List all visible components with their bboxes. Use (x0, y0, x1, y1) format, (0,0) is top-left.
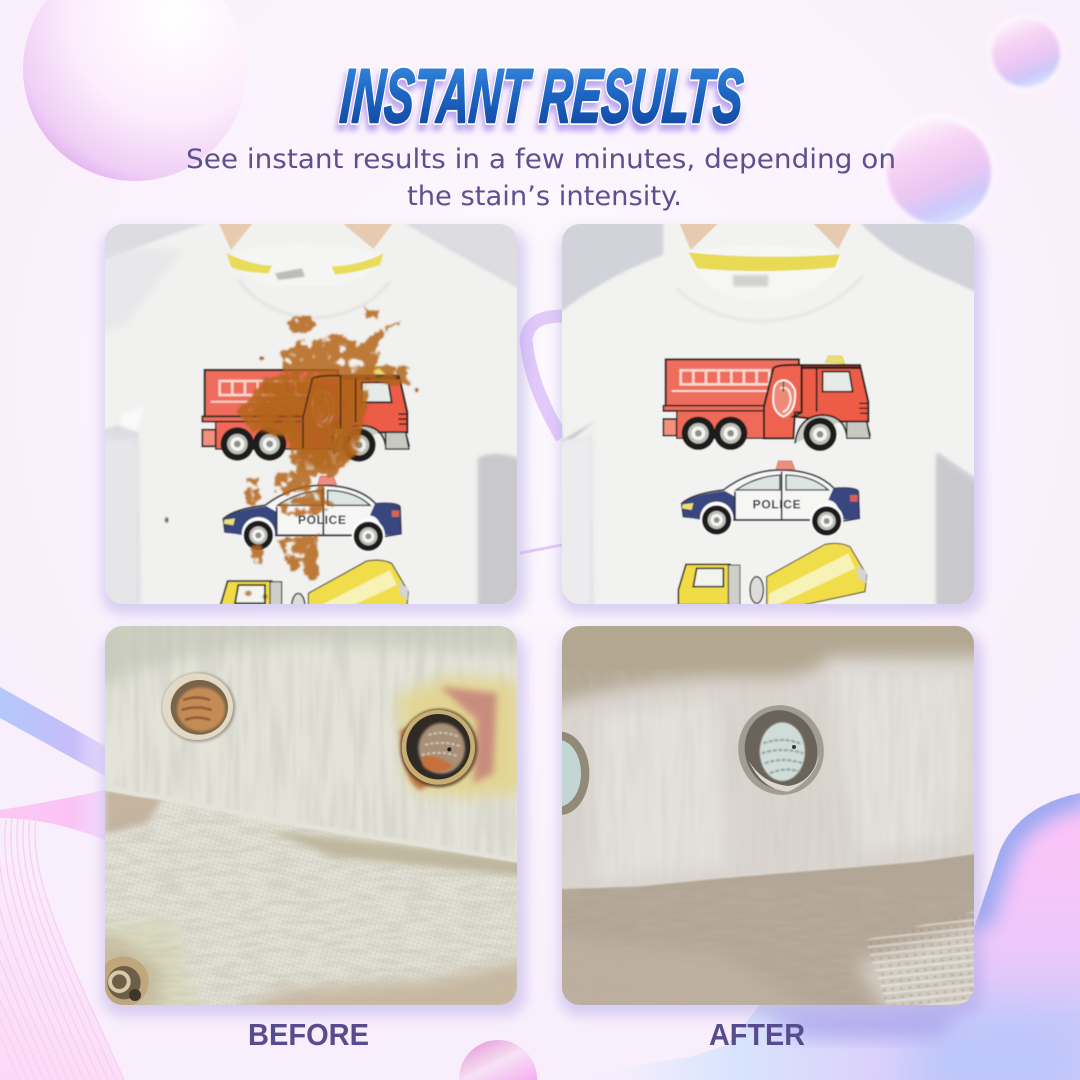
eyelet: left edge (531, 732, 589, 815)
decorative sphere: top left (23, 0, 247, 181)
police car (223, 476, 401, 552)
truck outlines showing through stain (303, 376, 356, 448)
lower fold lines (100, 807, 525, 1010)
flap ribs (555, 670, 980, 887)
inner collar (233, 244, 382, 287)
label: after: AFTER (709, 1017, 805, 1052)
panel shadows (102, 230, 983, 1016)
flap top band (105, 626, 517, 687)
title: INSTANT RESULTS (338, 54, 746, 139)
collar ring (677, 275, 863, 322)
label (275, 268, 305, 280)
flap highlights (595, 670, 968, 880)
eyelet: bottom left (93, 937, 163, 1017)
stain around eyelet (397, 677, 523, 797)
decorative sphere: top right small (988, 15, 1064, 91)
title: INSTANT RESULTS (338, 54, 746, 139)
upper ribbed flap (555, 620, 980, 920)
shirt backdrop (105, 224, 517, 460)
flap ribs (122, 647, 514, 856)
panel: before knit fabric (105, 626, 517, 1005)
flap top band (542, 607, 995, 710)
sleeve shading (98, 248, 525, 612)
decorative line waves: bottom left (0, 818, 124, 1080)
panel: after knit fabric (531, 607, 995, 1017)
yellow neck band (227, 253, 383, 274)
shirt backdrop (562, 224, 974, 484)
hanger (679, 224, 852, 250)
collar ring (238, 280, 390, 318)
decorative blob: bottom right (639, 793, 1080, 1080)
eyelet: centre (728, 695, 834, 805)
fire truck (663, 356, 870, 451)
decorative sphere: right of subtitle (882, 113, 996, 227)
decorative swirl between panels (520, 316, 562, 553)
title (338, 54, 746, 139)
hanger (218, 224, 393, 250)
decorative ribbon: pink strip on left (0, 790, 105, 840)
mixer truck (219, 558, 410, 604)
decorative ribbon: blue strip on left (0, 687, 105, 776)
stain core on truck (255, 378, 362, 470)
panel: before t-shirt (98, 218, 525, 622)
police label: POLICE (753, 498, 801, 512)
orange stain: main splash (237, 308, 410, 578)
police label: POLICE (298, 513, 347, 527)
shirt body (98, 218, 525, 612)
eyelet: top left (162, 673, 235, 742)
mixer truck (678, 543, 867, 605)
shirt body (553, 218, 982, 612)
lower fabric (105, 790, 517, 1005)
eyelet: stained (400, 709, 478, 787)
fire truck (202, 367, 409, 462)
label (733, 275, 768, 287)
stain: small drops (165, 357, 418, 599)
subtitle (186, 144, 896, 212)
lower fabric (555, 853, 980, 1010)
lower fabric shading (548, 920, 985, 1017)
inner collar (688, 245, 842, 300)
panel: after t-shirt (553, 218, 983, 612)
subtitle: See instant results in a few minutes, depending on (186, 144, 896, 175)
upper ribbed flap (105, 782, 517, 864)
lower fabric shading (93, 787, 527, 1017)
police car (682, 461, 859, 537)
lower knit texture (555, 887, 980, 1010)
subtitle: the stain’s intensity. (407, 181, 682, 212)
label: before: BEFORE (248, 1017, 369, 1052)
decorative sphere: bottom center (459, 1040, 537, 1080)
sleeve shading (553, 420, 982, 612)
yellow neck band (688, 252, 840, 271)
